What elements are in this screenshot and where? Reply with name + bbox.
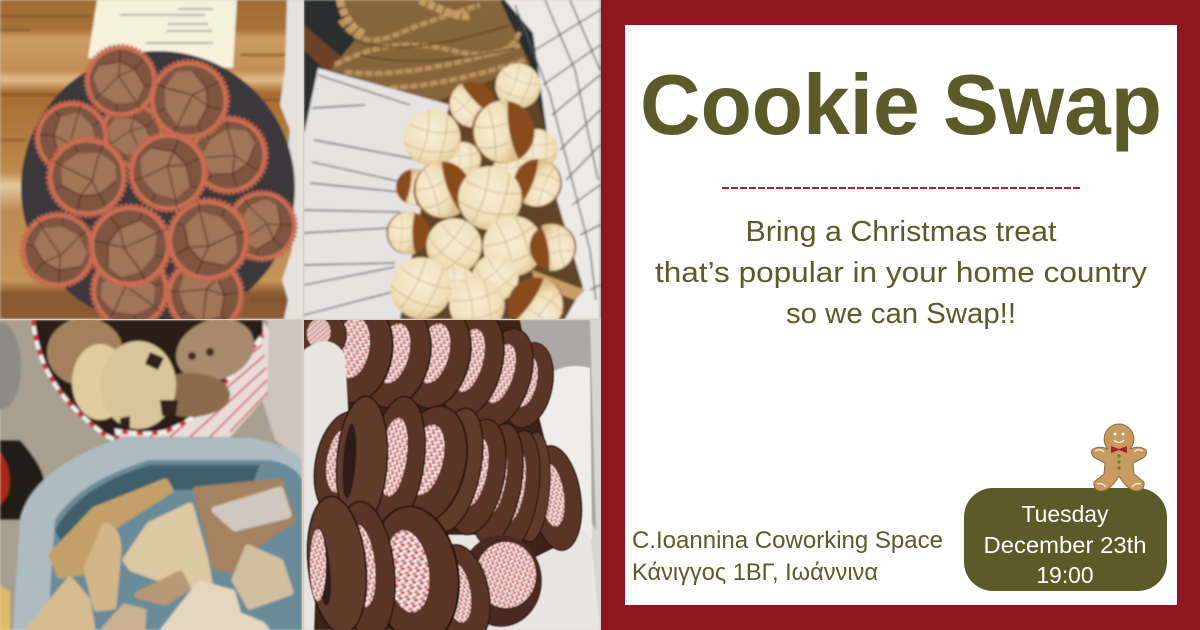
dark plate xyxy=(21,51,295,325)
striped towel xyxy=(304,68,450,319)
dark jar xyxy=(0,440,44,520)
translucent tub xyxy=(13,438,302,630)
parchment paper xyxy=(487,366,600,630)
cookies in tin xyxy=(45,320,255,431)
date and time badge: 19:00 xyxy=(1036,562,1094,588)
glass on counter xyxy=(0,322,21,410)
checked towel xyxy=(505,0,600,319)
woven basket xyxy=(330,0,530,105)
invitation text: Bring a Christmas treat xyxy=(746,216,1056,248)
panel: muffins photo xyxy=(0,0,306,347)
invitation text: so we can Swap!! xyxy=(786,298,1016,330)
lower row and flat cookie xyxy=(301,493,542,630)
panel: conchas bread in basket photo xyxy=(304,0,601,346)
date and time badge: Tuesday xyxy=(1022,501,1109,527)
lace strip xyxy=(280,0,303,319)
middle row of cookies xyxy=(306,393,588,554)
venue address xyxy=(632,527,943,586)
dashed divider xyxy=(722,187,1080,189)
panel: chocolate peppermint cookies photo xyxy=(304,320,601,630)
title: Cookie Swap xyxy=(640,58,1162,153)
date and time badge: December 23th xyxy=(984,532,1146,558)
plastic bag xyxy=(262,320,302,460)
handwritten note xyxy=(88,0,237,68)
top row of cookies xyxy=(304,320,555,428)
wooden table xyxy=(0,0,303,319)
muffins xyxy=(18,42,300,319)
striped tin xyxy=(33,320,269,439)
invitation text: that’s popular in your home country xyxy=(655,257,1148,289)
icon: gingerbread man xyxy=(1092,424,1146,491)
left parchment flap xyxy=(304,341,348,630)
shadow behind conchas xyxy=(400,65,590,319)
venue address: Κάνιγγος 1ΒΓ, Ιωάννινα xyxy=(632,559,878,586)
invitation text xyxy=(655,216,1148,330)
sugared biscuits xyxy=(0,482,292,630)
backing behind photo collage xyxy=(0,0,601,630)
panel: white announcement card xyxy=(625,25,1177,605)
shadow under cookies xyxy=(304,320,570,630)
panel: cookie tin and sugared biscuits photo xyxy=(0,308,302,630)
conchas xyxy=(385,62,586,319)
date and time badge xyxy=(964,488,1167,591)
venue address: C.Ioannina Coworking Space xyxy=(632,527,943,554)
